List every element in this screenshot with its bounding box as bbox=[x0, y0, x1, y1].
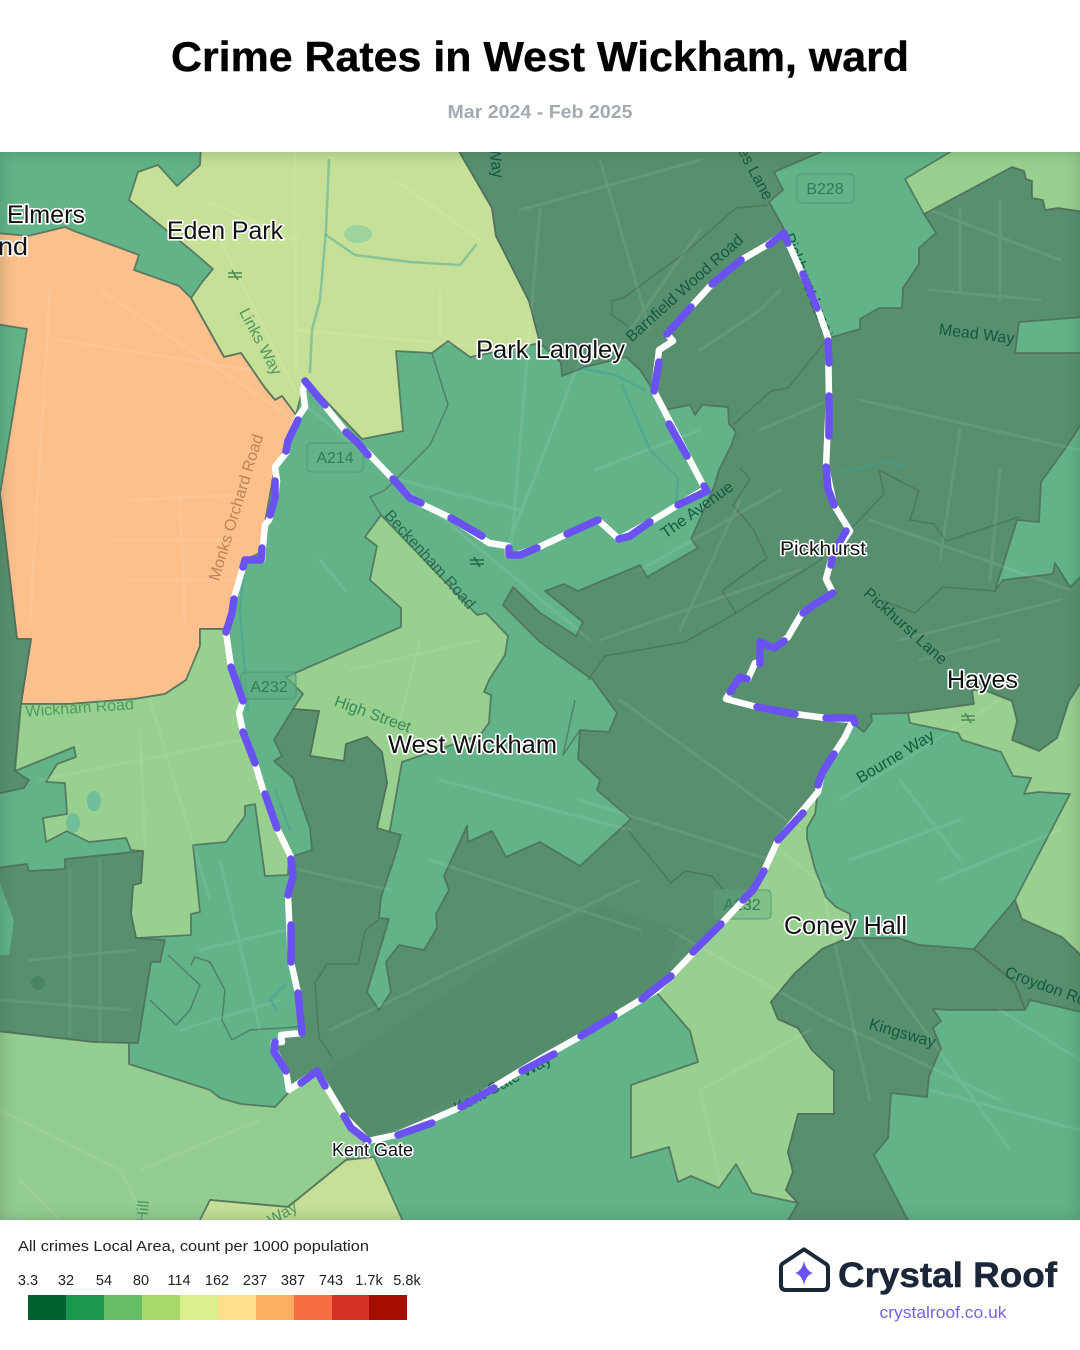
place name labels: Elmers bbox=[7, 201, 85, 229]
region: main dark area within and east of the ward bbox=[272, 146, 1080, 1141]
ward boundary: purple dashes bbox=[226, 233, 855, 1141]
place name labels bbox=[0, 201, 1018, 1160]
region: top-right light area bbox=[905, 146, 1080, 214]
logo wordmark: Crystal Roof bbox=[838, 1256, 1057, 1295]
road shields bbox=[241, 174, 854, 919]
road name labels: High Street bbox=[332, 693, 414, 737]
region: light area south of Wickham Road bbox=[15, 629, 289, 938]
road shields: B228 bbox=[806, 181, 844, 198]
title: Crime Rates in West Wickham, ward bbox=[171, 33, 909, 80]
legend scale values: 32 bbox=[58, 1273, 74, 1289]
road name labels: Links Way bbox=[235, 306, 285, 378]
legend scale values: 162 bbox=[205, 1273, 229, 1289]
icon: rail stations bbox=[228, 270, 975, 723]
street network bbox=[0, 152, 1080, 1220]
road name labels: Bourne Way bbox=[854, 727, 938, 787]
legend scale values: 80 bbox=[133, 1273, 149, 1289]
place name labels: Pickhurst bbox=[780, 539, 867, 560]
legend title: All crimes Local Area, count per 1000 population bbox=[18, 1239, 369, 1255]
legend scale values bbox=[18, 1273, 421, 1289]
logo: Crystal Roof bbox=[781, 1250, 1057, 1322]
legend scale values: 114 bbox=[167, 1273, 191, 1289]
road shields: A232 bbox=[250, 679, 288, 696]
region: West Wickham light centre bbox=[286, 515, 508, 835]
region: Coney Hall light area bbox=[631, 792, 852, 1203]
road name labels: Barnfield Wood Road bbox=[623, 232, 747, 346]
road name labels: Pickhurst Lane bbox=[779, 231, 835, 336]
icon: house with star bbox=[781, 1250, 828, 1290]
road name labels: es Lane bbox=[734, 145, 776, 203]
road name labels: Mead Way bbox=[938, 321, 1015, 348]
region: Kingsway dark area bbox=[771, 900, 1080, 1224]
road name labels: Kingsway bbox=[867, 1016, 937, 1051]
region: Monks Orchard orange high-crime area bbox=[0, 227, 296, 704]
road name labels: Way bbox=[265, 1199, 301, 1229]
place name labels: Kent Gate bbox=[332, 1140, 413, 1160]
region: far-left dark strip bbox=[0, 494, 31, 794]
legend scale values: 1.7k bbox=[355, 1273, 383, 1289]
website: crystalroof.co.uk bbox=[880, 1304, 1007, 1322]
region: south-west dark block bbox=[0, 851, 165, 1043]
legend scale values: 743 bbox=[319, 1273, 343, 1289]
legend bbox=[18, 1239, 421, 1320]
place name labels: Coney Hall bbox=[784, 912, 907, 940]
road shields: A232 bbox=[723, 897, 761, 914]
road name labels: Hill bbox=[134, 1200, 153, 1223]
road name labels: Monks Orchard Road bbox=[206, 432, 267, 583]
map area boundary lines bbox=[150, 205, 1019, 1057]
road name labels: Wickham Road bbox=[25, 696, 134, 721]
place name labels: Park Langley bbox=[476, 336, 625, 364]
road name labels: Pickhurst Lane bbox=[860, 585, 950, 668]
legend scale values: 3.3 bbox=[18, 1273, 38, 1289]
ward boundary: white line bbox=[226, 233, 853, 1141]
region: Eden Park low-crime area bbox=[129, 146, 540, 439]
region: darker south of ward woodland bbox=[325, 905, 680, 1141]
road name labels: The Avenue bbox=[658, 478, 737, 542]
region: south-west light parkland bbox=[0, 1031, 368, 1224]
place name labels: Hayes bbox=[947, 666, 1018, 694]
region: Kent Gate lightest area bbox=[198, 1157, 404, 1224]
road name labels bbox=[25, 145, 1080, 1229]
legend scale values: 237 bbox=[243, 1273, 267, 1289]
region: Hayes light area bbox=[908, 676, 1080, 959]
legend scale values: 5.8k bbox=[393, 1273, 421, 1289]
rivers and ponds bbox=[31, 160, 905, 1010]
place name labels: Eden Park bbox=[167, 217, 283, 245]
place name labels: West Wickham bbox=[388, 731, 557, 759]
legend colour bar bbox=[28, 1295, 407, 1320]
legend scale values: 387 bbox=[281, 1273, 305, 1289]
road name labels: Way bbox=[485, 146, 506, 179]
road name labels: Kent Gate Way bbox=[451, 1051, 555, 1117]
road name labels: Beckenham Road bbox=[380, 507, 478, 613]
subtitle: date range: Mar 2024 - Feb 2025 bbox=[448, 102, 632, 122]
legend scale values: 54 bbox=[96, 1273, 112, 1289]
road shields: A214 bbox=[316, 450, 354, 467]
